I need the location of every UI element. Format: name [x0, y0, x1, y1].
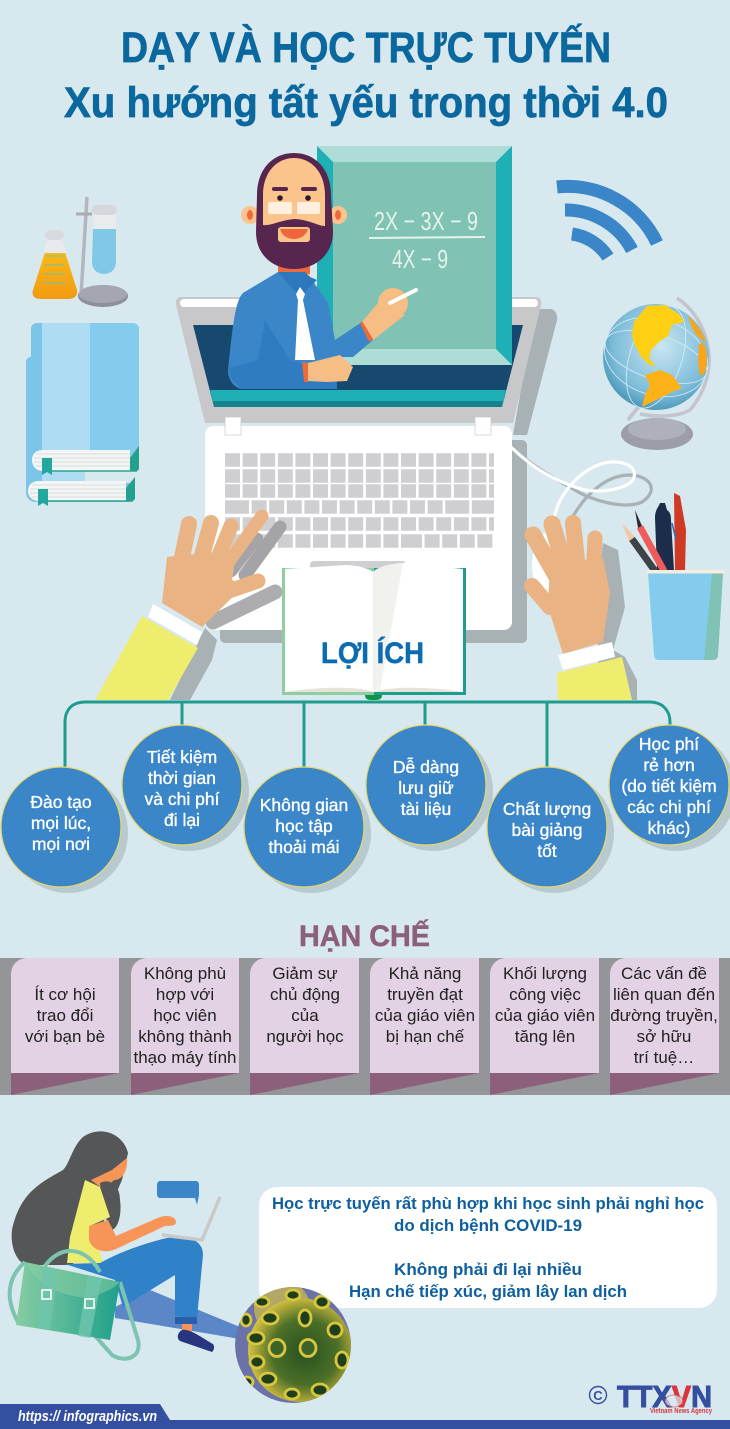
- panel: limitations: [0, 958, 730, 1095]
- tree connector: [65, 702, 670, 767]
- limitation 4: [370, 958, 479, 1095]
- icon: left hand on keyboard: [95, 516, 280, 700]
- limitation 1: Ít cơ hội: [34, 985, 96, 1004]
- limitation 6: trí tuệ…: [634, 1048, 694, 1067]
- chalkboard: [317, 146, 512, 365]
- icon: wifi signal: [557, 186, 657, 257]
- speech bubble: [157, 1181, 199, 1205]
- logo: ttxvn: TTXVN: [617, 1379, 712, 1414]
- benefit 1: mọi lúc,: [31, 813, 91, 833]
- limitation 4: Khả năng: [389, 964, 461, 983]
- limitation 4: của giáo viên: [375, 1006, 475, 1025]
- benefit 6: [609, 725, 730, 851]
- benefit 4: Dễ dàng: [393, 756, 459, 777]
- title: Xu hướng tất yếu trong thời 4.0: [64, 79, 668, 127]
- limitation 2: không thành: [138, 1027, 232, 1046]
- benefit 6: các chi phí: [627, 797, 711, 817]
- heading: han che: HẠN CHẾ: [299, 919, 430, 953]
- limitation 5: công việc: [509, 985, 581, 1004]
- panel: benefits circles: [1, 725, 730, 893]
- limitation 6: Các vấn đề: [621, 964, 707, 983]
- limitation 4: truyền đạt: [387, 985, 463, 1004]
- benefit 1: [1, 767, 128, 893]
- benefit 1: Đào tạo: [30, 792, 92, 812]
- panel: open book: [282, 563, 466, 700]
- limitation 5: tăng lên: [515, 1027, 575, 1046]
- limitation 6: liên quan đến: [613, 985, 715, 1004]
- panel: covid note: Không phải đi lại nhiều: [394, 1260, 582, 1279]
- limitation 2: [131, 958, 239, 1095]
- limitation 3: chủ động: [270, 985, 340, 1004]
- panel: covid note: Hạn chế tiếp xúc, giảm lây lan dịch: [349, 1282, 627, 1301]
- chalkboard equation: [369, 206, 485, 274]
- hair and beard: [256, 153, 333, 269]
- benefit 5: Chất lượng: [503, 799, 591, 819]
- tie: [295, 287, 315, 360]
- laptop screen shadow: [513, 309, 557, 435]
- icon: stacked books: [26, 323, 139, 506]
- limitation 2: Không phù: [144, 964, 226, 983]
- benefit 6: Học phí: [639, 734, 699, 754]
- limitation 1: với bạn bè: [25, 1027, 105, 1046]
- limitation 2: hợp với: [156, 985, 214, 1004]
- benefit 6: rẻ hơn: [643, 755, 695, 775]
- icon: green bag: [10, 1251, 139, 1359]
- laptop keyboard base: [205, 426, 527, 643]
- laptop hinges: [225, 417, 491, 435]
- benefit 3: Không gian: [260, 795, 348, 815]
- benefit 3: học tập: [275, 816, 333, 836]
- forearm raised: [362, 303, 405, 340]
- limitation 3: Giảm sự: [272, 964, 338, 983]
- benefit 4: lưu giữ: [398, 778, 454, 798]
- shirt: [228, 272, 337, 389]
- laptop screen frame: [176, 297, 541, 423]
- icon: coronavirus: [235, 1280, 352, 1403]
- icon: globe: [594, 298, 718, 450]
- limitation 6: [610, 958, 719, 1095]
- benefit 6: (do tiết kiệm: [621, 776, 717, 796]
- laptop screen interior: [193, 325, 523, 407]
- benefit 6: khác): [648, 818, 690, 838]
- footer bar: [0, 1404, 730, 1429]
- title: [64, 24, 668, 127]
- limitation 6: đường truyền,: [610, 1006, 718, 1025]
- chalkboard equation: 2X − 3X − 9: [374, 206, 478, 236]
- limitation 2: học viên: [153, 1006, 217, 1025]
- teacher: [228, 153, 416, 389]
- source url: https:// infographics.vn: [18, 1408, 157, 1425]
- benefit 5: tốt: [537, 841, 557, 861]
- icon: laboratory flask and test tube: [32, 197, 128, 307]
- illustration: student with laptop: [12, 1131, 240, 1352]
- benefit 2: đi lại: [164, 810, 200, 830]
- panel: covid note: [259, 1187, 717, 1308]
- benefit 5: [487, 767, 614, 893]
- benefit 1: mọi nơi: [32, 834, 90, 854]
- benefit 2: thời gian: [148, 768, 216, 788]
- limitation 3: [250, 958, 359, 1095]
- forearm and hand on desk: [308, 355, 353, 382]
- limitation 3: của: [291, 1006, 319, 1025]
- limitation 5: [490, 958, 599, 1095]
- panel: laptop with teacher: [176, 146, 557, 643]
- panel: covid note: Học trực tuyến rất phù hợp khi học sinh phải nghỉ học: [272, 1194, 704, 1213]
- benefit 4: tài liệu: [401, 799, 451, 819]
- limitation 2: thạo máy tính: [133, 1048, 237, 1067]
- limitation 1: trao đổi: [37, 1006, 93, 1025]
- logo: ttxvn: Vietnam News Agency: [650, 1406, 713, 1415]
- benefit 2: và chi phí: [145, 789, 220, 809]
- benefit 3: thoải mái: [268, 837, 340, 857]
- limitation 4: bị hạn chế: [386, 1027, 465, 1046]
- limitation 3: người học: [266, 1027, 344, 1046]
- benefit 2: [122, 725, 249, 851]
- benefit 3: [244, 767, 371, 893]
- icon: mouse cable: [512, 448, 651, 518]
- icon: pen cup: [622, 493, 724, 660]
- benefit 5: bài giảng: [511, 820, 583, 840]
- chalkboard equation: 4X − 9: [392, 244, 448, 274]
- heading: loi ich: LỢI ÍCH: [321, 636, 424, 670]
- benefit 4: [366, 725, 493, 851]
- limitation 5: của giáo viên: [495, 1006, 595, 1025]
- limitation 5: Khối lượng: [503, 964, 587, 983]
- icon: right hand on mouse: [532, 523, 637, 700]
- limitation 1: [11, 958, 119, 1095]
- benefit 2: Tiết kiệm: [147, 747, 217, 767]
- panel: covid note: do dịch bệnh COVID-19: [394, 1216, 582, 1235]
- title: DẠY VÀ HỌC TRỰC TUYẾN: [121, 24, 611, 72]
- logo: ttxvn: C: [593, 1388, 603, 1403]
- limitation 6: sở hữu: [637, 1027, 691, 1046]
